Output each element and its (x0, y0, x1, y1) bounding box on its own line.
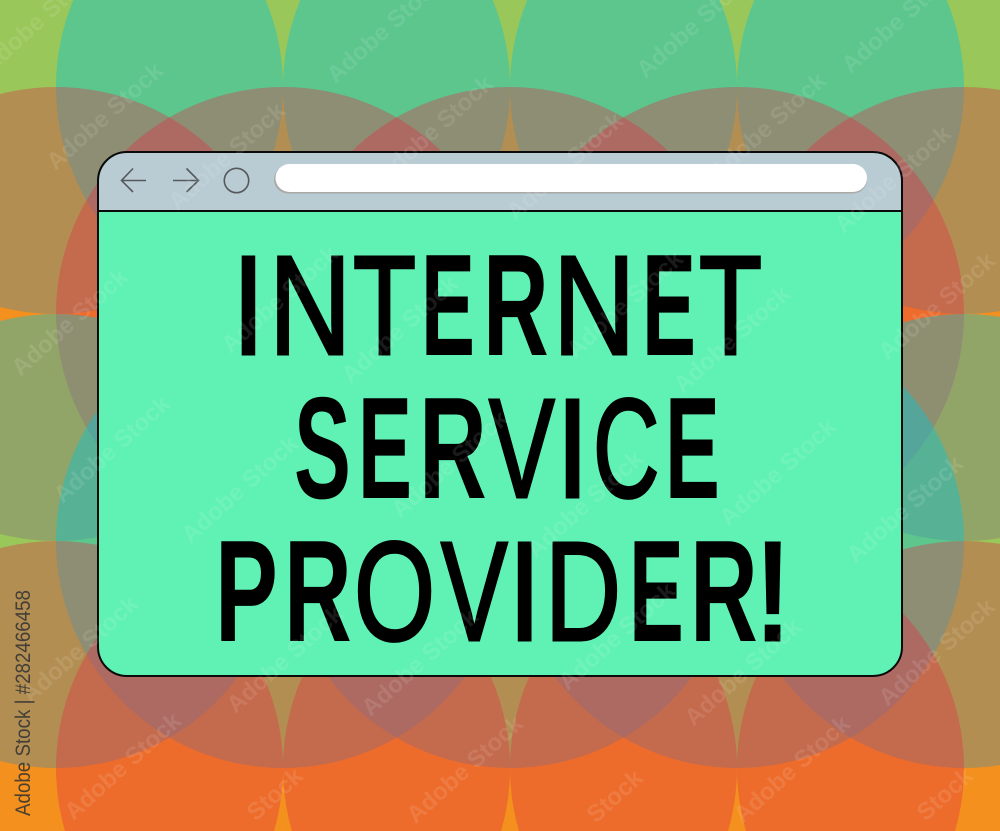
watermarks: Adobe Stock (401, 710, 529, 829)
watermarks: Adobe Stock (41, 57, 169, 176)
title line 2: V (489, 369, 554, 527)
watermarks: Adobe Stock (221, 600, 349, 719)
watermarks: Stock (242, 762, 309, 826)
watermarks: Adobe Stock (553, 577, 681, 696)
watermarks: Adobe Stock (216, 240, 344, 359)
window outline (98, 152, 902, 676)
watermarks: Adobe Stock (176, 430, 304, 549)
watermarks: Adobe Stock (873, 593, 1000, 712)
title line 2: R (419, 367, 487, 529)
icon: forward arrow (173, 168, 198, 192)
title line 2: S (294, 367, 351, 529)
watermarks: Adobe Stock (561, 245, 689, 364)
circle row 2: red-orange (0, 87, 1000, 541)
watermarks: Adobe Stock (668, 280, 796, 399)
circle row 4: red-orange (0, 541, 1000, 831)
watermarks: Adobe Stock (704, 67, 832, 186)
watermarks: Adobe Stock (501, 107, 629, 226)
watermarks: Adobe Stock (829, 120, 957, 239)
title line 1 (232, 233, 762, 386)
title line 2: E (358, 367, 412, 529)
watermarks: Adobe Stock (48, 390, 176, 509)
icon: back arrow (122, 168, 146, 192)
watermarks: Adobe Stock (371, 70, 499, 189)
window content panel (98, 152, 902, 676)
title: Internet Service Provider! (215, 233, 792, 645)
title line 2: E (664, 367, 719, 529)
watermarks: Adobe Stock (163, 97, 291, 216)
watermarks: Adobe Stock (356, 603, 484, 722)
circle row 3: teal (0, 314, 1000, 768)
title line 2: I (556, 369, 589, 527)
watermarks: Adobe Stock (841, 450, 969, 569)
watermarks: Adobe Stock (521, 445, 649, 564)
watermarks: Adobe Stock (386, 405, 514, 524)
vertical stock id label: Adobe Stock | #282466458 (12, 590, 35, 816)
circle row 1: teal (0, 0, 1000, 314)
watermarks: Adobe Stock (679, 613, 807, 732)
watermarks: Adobe Stock (714, 413, 842, 532)
icon: reload circle (224, 168, 249, 193)
watermarks: Adobe Stock (16, 590, 144, 709)
watermarks: Stock (912, 762, 979, 826)
watermarks: Adobe Stock (59, 707, 187, 826)
title line 2 (294, 367, 719, 529)
watermarks: Adobe Stock (336, 270, 464, 389)
title line 2: C (593, 369, 659, 527)
watermarks: Stock (582, 764, 649, 828)
title line 3 (215, 510, 792, 645)
watermarks: Adobe Stock (728, 710, 856, 829)
watermarks: Adobe Stock (873, 247, 1000, 366)
watermarks: Adobe Stock (6, 263, 134, 382)
browser window (98, 152, 902, 676)
window title bar (98, 152, 902, 212)
address bar (274, 164, 867, 194)
